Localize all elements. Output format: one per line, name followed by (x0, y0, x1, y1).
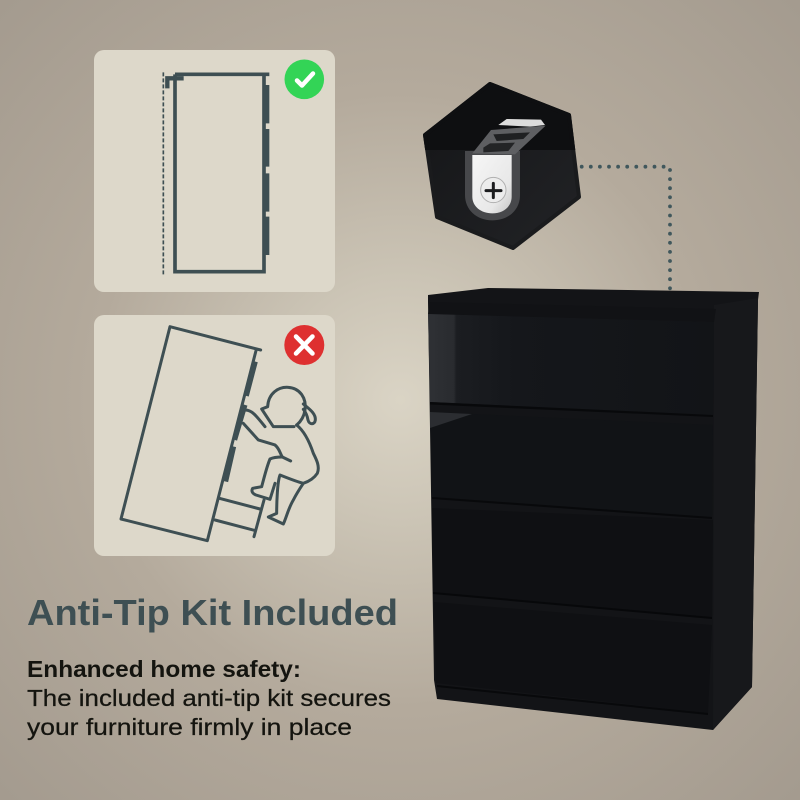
icon: red cross badge (284, 325, 324, 365)
body line 2: your furniture firmly in place (27, 714, 352, 740)
dotted connector line (582, 167, 670, 290)
drawer 3 (432, 508, 713, 617)
drawer 1 gap (430, 402, 713, 417)
icon: anchored dresser line drawing (163, 72, 269, 275)
text block: safety description (27, 656, 391, 740)
subheading: Enhanced home safety: (27, 656, 301, 682)
black glossy chest of drawers (428, 288, 759, 730)
drawer 3 gap (433, 592, 712, 619)
plinth line (437, 685, 708, 715)
drawer 4 (434, 602, 712, 713)
drawer 2 gap (432, 497, 712, 519)
icon: metal anchor bracket with screw (465, 119, 546, 220)
drawer 2 highlight (430, 412, 472, 428)
icon: tipping dresser with climbing child (121, 327, 318, 541)
chest body (428, 288, 759, 730)
panel: correct anchored dresser (94, 50, 335, 292)
title: Anti-Tip Kit Included (27, 592, 398, 633)
panel: unsafe tipping dresser (94, 315, 335, 556)
drawer 2 (430, 412, 713, 517)
icon: green check badge (284, 60, 324, 99)
drawer 1 (428, 314, 714, 415)
callout: hexagon bracket detail (425, 84, 579, 248)
body line 1: The included anti-tip kit secures (27, 685, 391, 711)
